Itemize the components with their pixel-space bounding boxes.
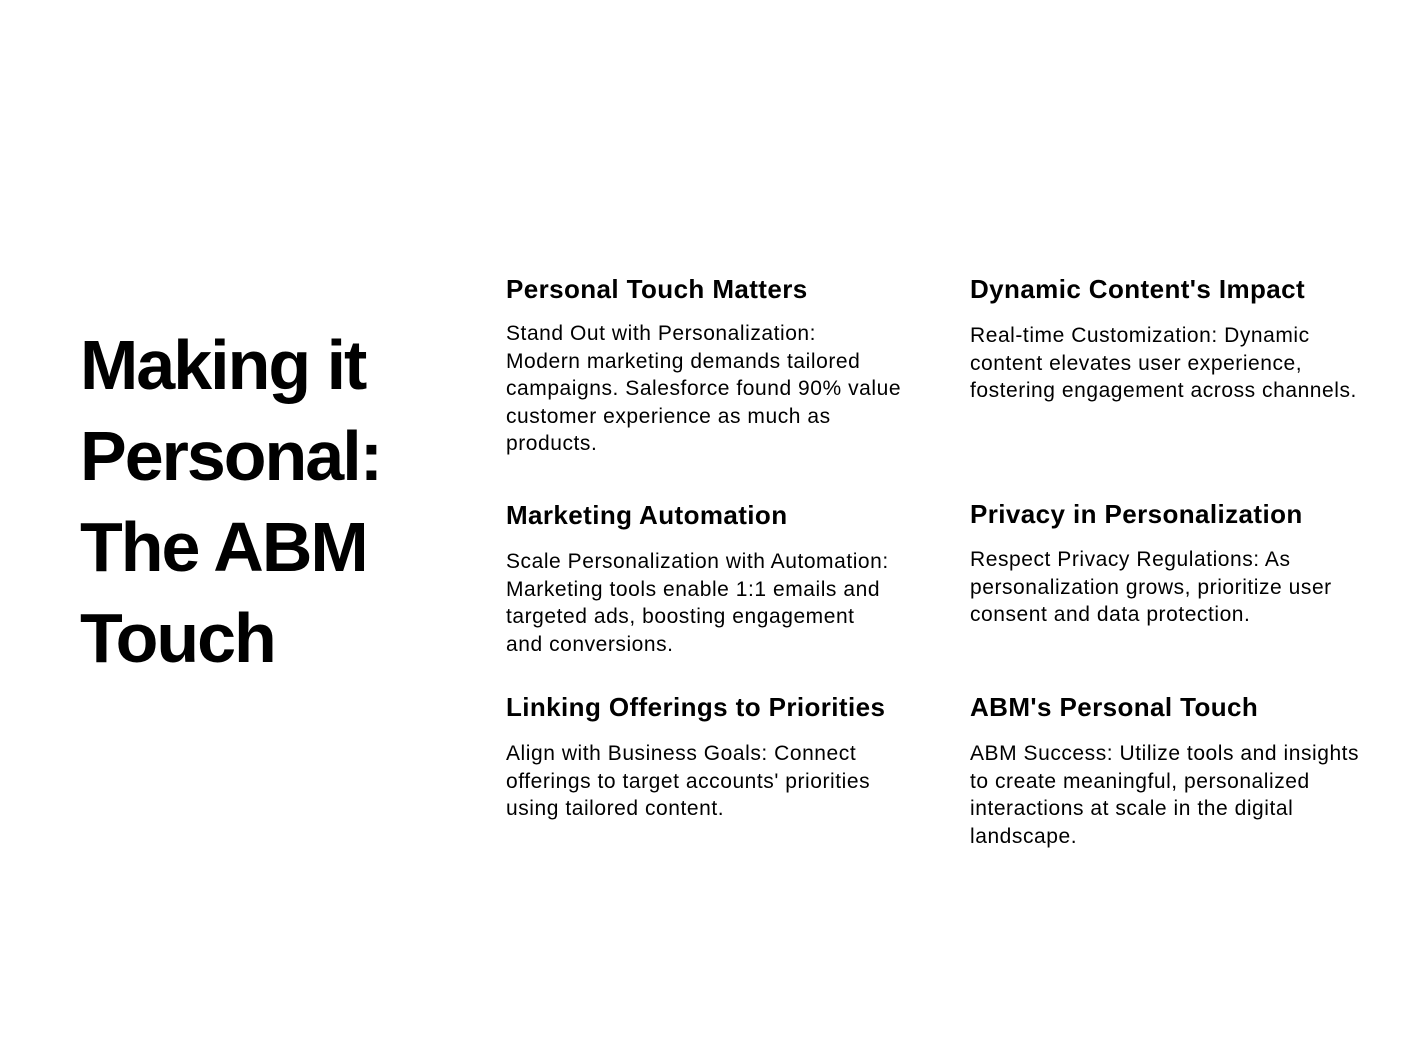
block: personal touch matters: customer experience as much as [506, 404, 831, 428]
block: privacy: consent and data protection. [970, 603, 1250, 626]
block: linking offerings: offerings to target accounts' priorities [506, 770, 870, 792]
block: linking offerings: Linking Offerings to Priorities [506, 692, 885, 722]
title: Touch [80, 599, 275, 677]
block: linking offerings [506, 692, 885, 820]
block: privacy: personalization grows, prioritize user [970, 576, 1332, 598]
block: marketing automation: and conversions. [506, 632, 674, 656]
block: dynamic content: fostering engagement across channels. [970, 379, 1357, 402]
block: personal touch matters: Personal Touch Matters [506, 274, 808, 304]
block: privacy: Privacy in Personalization [970, 499, 1303, 529]
block: linking offerings: using tailored content. [506, 797, 724, 820]
block: dynamic content: content elevates user experience, [970, 352, 1302, 374]
block: ABM personal touch: landscape. [970, 824, 1077, 848]
block: marketing automation [506, 500, 889, 656]
block: marketing automation: Marketing tools enable 1:1 emails and [506, 578, 880, 600]
block: privacy [970, 499, 1332, 626]
block: personal touch matters: Modern marketing demands tailored [506, 350, 860, 372]
block: personal touch matters [506, 274, 901, 455]
block: ABM personal touch: to create meaningful, personalized [970, 770, 1310, 792]
block: dynamic content [970, 274, 1357, 402]
title [80, 326, 381, 677]
block: marketing automation: Scale Personalization with Automation: [506, 550, 889, 573]
block: personal touch matters: products. [506, 432, 597, 455]
block: personal touch matters: campaigns. Salesforce found 90% value [506, 377, 901, 400]
block: ABM personal touch: ABM Success: Utilize tools and insights [970, 742, 1359, 765]
title: Personal: [80, 417, 381, 495]
block: personal touch matters: Stand Out with Personalization: [506, 322, 816, 345]
block: ABM personal touch [970, 692, 1359, 848]
block: ABM personal touch: ABM's Personal Touch [970, 692, 1258, 722]
block: marketing automation: targeted ads, boosting engagement [506, 605, 855, 628]
title: The ABM [80, 508, 367, 586]
block: linking offerings: Align with Business Goals: Connect [506, 742, 856, 765]
block: dynamic content: Dynamic Content's Impact [970, 274, 1305, 304]
block: marketing automation: Marketing Automation [506, 500, 787, 530]
block: privacy: Respect Privacy Regulations: As [970, 548, 1291, 571]
title: Making it [80, 326, 365, 404]
block: ABM personal touch: interactions at scale in the digital [970, 797, 1293, 820]
block: dynamic content: Real-time Customization: Dynamic [970, 324, 1310, 347]
